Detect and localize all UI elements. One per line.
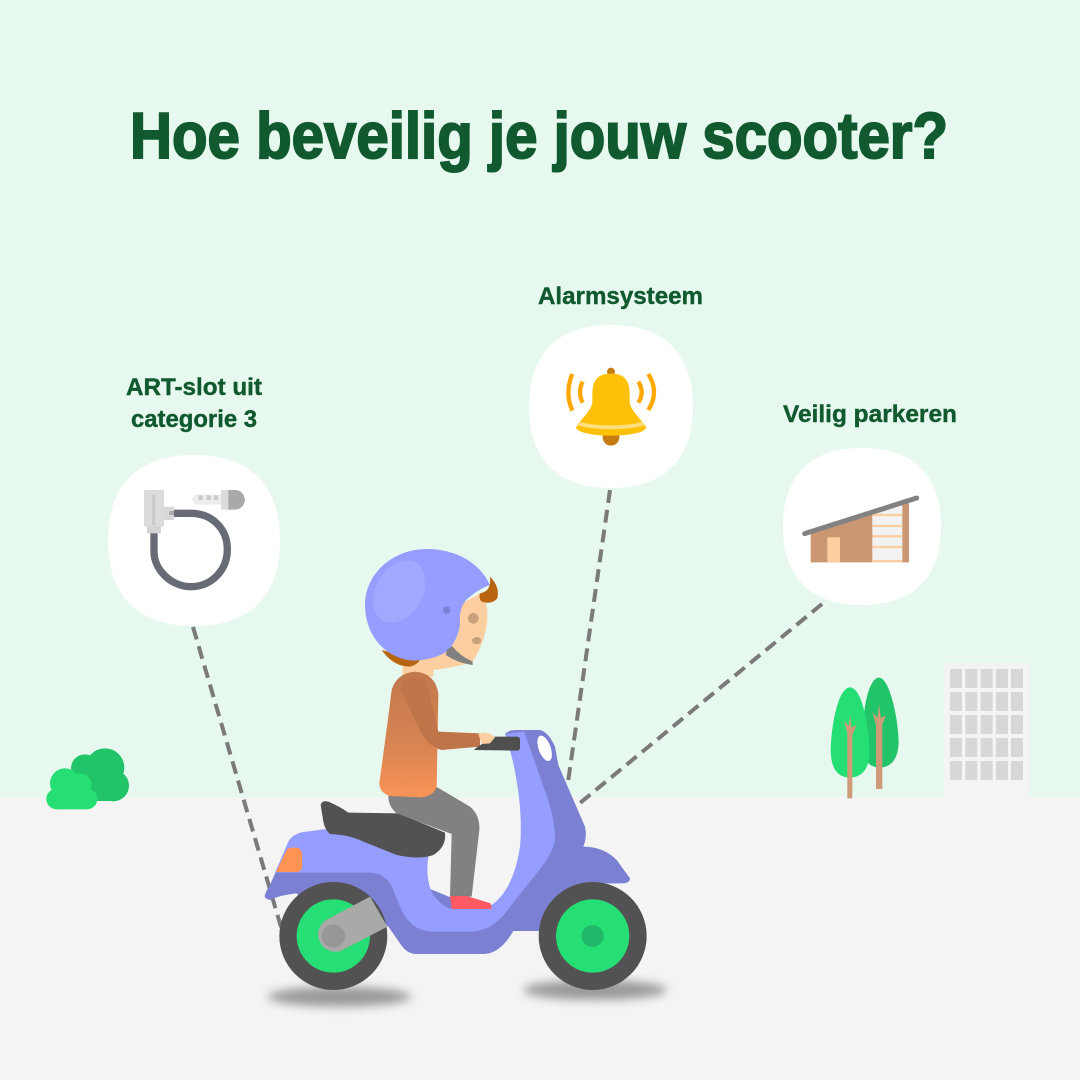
background sky [0, 0, 1080, 797]
torso [379, 672, 438, 797]
shoe [450, 896, 492, 909]
bubble shape [783, 448, 941, 605]
swing arm [318, 897, 387, 952]
panel: alarm icon bubble [529, 325, 693, 488]
label: ART-slot: ART-slot uit [126, 374, 262, 401]
icon: cable lock [144, 490, 245, 587]
back hair [382, 650, 420, 667]
icon: bell [568, 368, 654, 446]
trees [831, 678, 899, 798]
legs [388, 786, 479, 897]
scooter and rider [265, 549, 667, 1007]
seat [321, 801, 445, 857]
rear hub [322, 924, 345, 948]
hand [478, 733, 495, 744]
front wheel [539, 882, 647, 990]
panel: lock icon bubble [108, 455, 280, 626]
building [944, 663, 1029, 797]
dashed line: alarm [568, 490, 610, 782]
arm [401, 677, 480, 750]
scooter body shade [265, 730, 630, 954]
helmet strap [446, 646, 473, 665]
handlebar grip [474, 737, 520, 751]
helmet [365, 549, 490, 661]
dashed line: lock [193, 627, 281, 927]
mouth [472, 637, 481, 644]
hair curl [479, 577, 498, 603]
scooter body light [275, 732, 555, 932]
icon: garage [805, 498, 917, 562]
helmet highlight [362, 551, 436, 632]
label: Alarmsysteem: Alarmsysteem [538, 283, 703, 310]
title: Hoe beveilig je jouw scooter? [130, 99, 948, 172]
label: ART-slot [126, 374, 262, 433]
ground [0, 797, 1080, 1080]
label: Veilig parkeren: Veilig parkeren [783, 401, 957, 428]
label: ART-slot: categorie 3 [131, 406, 257, 433]
tail light [276, 848, 302, 872]
bubble shape [108, 455, 280, 626]
panel: parking icon bubble [783, 448, 941, 605]
dashed line: parking [580, 604, 822, 803]
headlight [534, 734, 555, 763]
wheel shadows [268, 980, 667, 1007]
eye [468, 613, 479, 624]
face and neck [403, 593, 487, 677]
bubble shape [529, 325, 693, 488]
bushes [46, 748, 129, 809]
helmet rivet [443, 606, 450, 614]
rear wheel [279, 882, 387, 990]
